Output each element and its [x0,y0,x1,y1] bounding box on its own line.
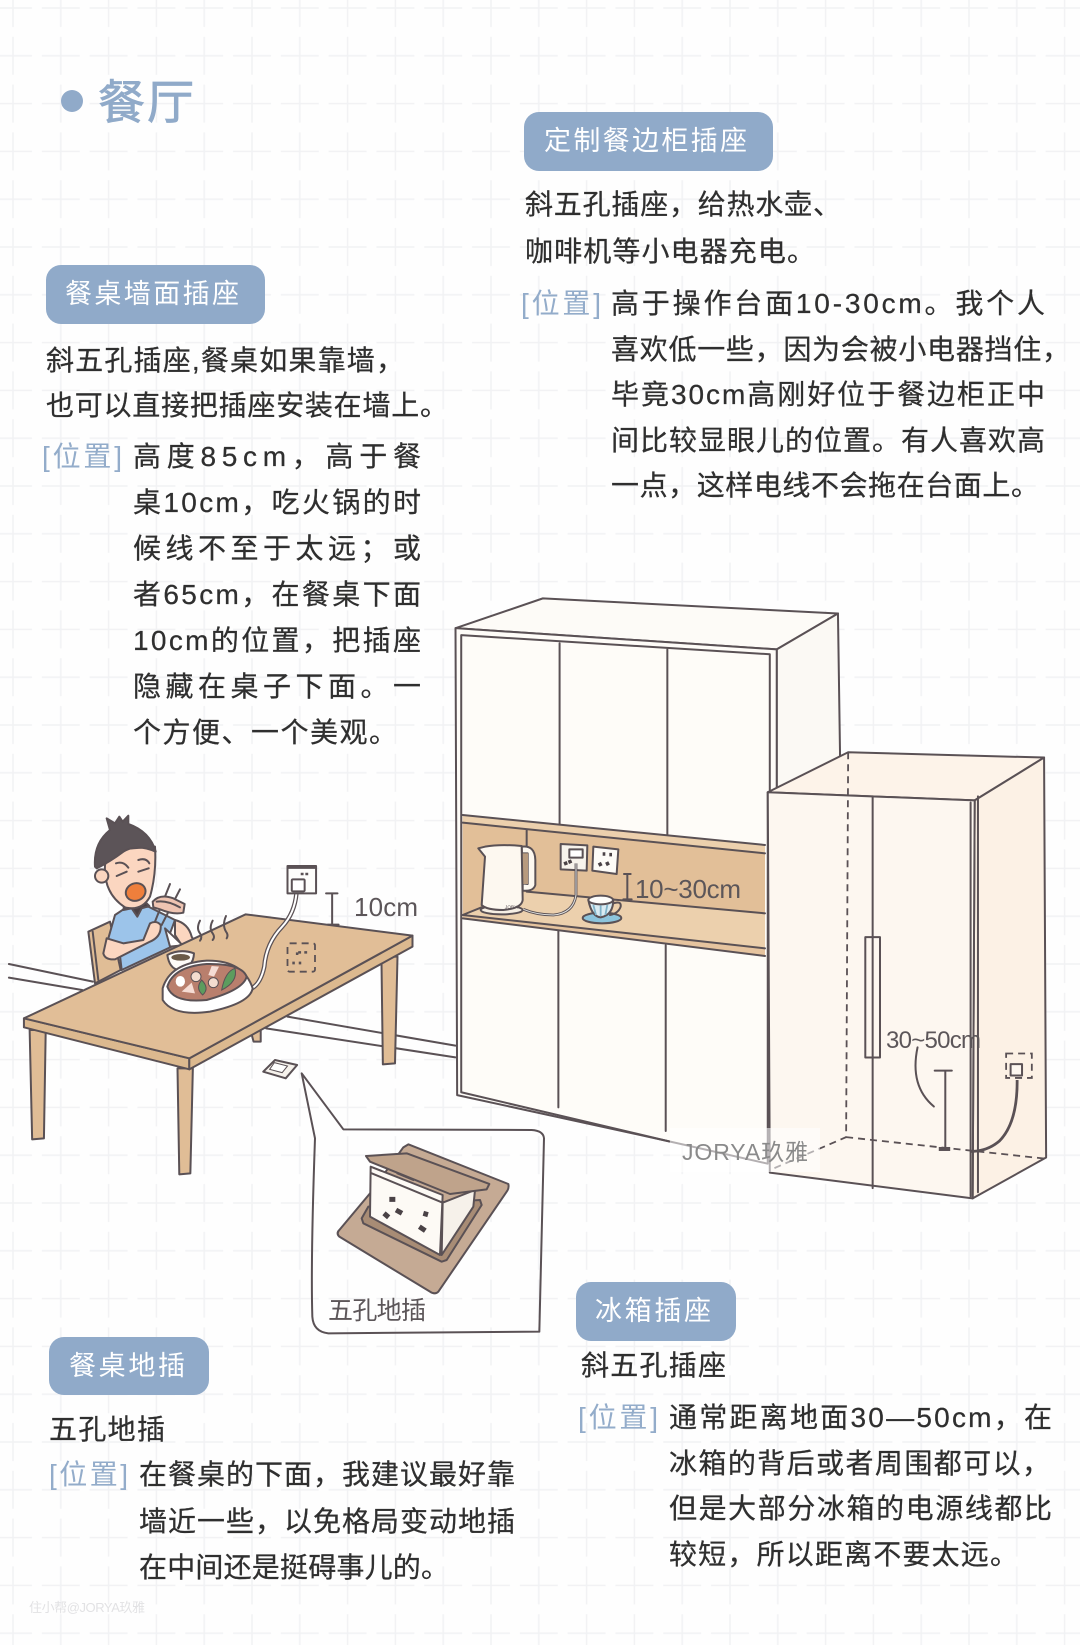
text block: fridge socket position [578,1402,1052,1570]
text block: wall socket position: 10cm的位置，把插座 [133,625,421,656]
panel: dining table wall socket text [42,265,448,748]
label: 30-50cm: 30~50cm [886,1027,981,1054]
icon: wall socket with plug and cord [252,866,316,988]
text block: wall socket position: [位置] [42,441,122,472]
panel: sideboard socket text [521,112,1070,501]
label: five-hole floor socket: 五孔地插 [328,1297,426,1325]
icon: hidden socket under table [287,943,315,972]
text block: sideboard description: 斜五孔插座，给热水壶、 [525,189,841,220]
text block: sideboard description: 咖啡机等小电器充电。 [525,236,815,267]
text block: wall socket position [42,441,421,748]
text block: floor socket position: 在中间还是挺碍事儿的。 [139,1552,449,1583]
text block: wall socket position: 个方便、一个美观。 [133,717,397,748]
watermark: source: 住小帮@JORYA玖雅 [29,1600,145,1615]
label: 10-30cm: 10~30cm [635,874,741,904]
watermark [670,1128,820,1172]
heading pill: fridge socket: 冰箱插座 [595,1296,711,1326]
text block: wall socket position: 候线不至于太远；或 [133,533,421,564]
watermark: JORYA玖雅 [682,1139,808,1165]
text block: wall socket description: 斜五孔插座,餐桌如果靠墙， [46,345,404,376]
text block: fridge socket position: 较短，所以距离不要太远。 [669,1539,1018,1570]
icon: chair and person eating [88,816,199,983]
icon: small floor socket [263,1060,297,1078]
text block: sideboard position: 喜欢低一些，因为会被小电器挡住， [611,334,1070,365]
text block: wall socket position: 高度85cm，高于餐 [133,441,421,472]
dimension marker 30-50cm [916,1047,952,1149]
table top [24,914,412,1069]
heading pill: dining table wall socket [46,265,265,324]
text block: wall socket position: 者65cm，在餐桌下面 [133,579,421,610]
dimension marker 10cm [326,893,339,925]
heading pill: sideboard socket [524,112,773,171]
illustration: fridge [768,752,1046,1198]
panel: floor socket text [49,1337,515,1583]
icon: bowl, hot pot and steam [163,916,253,1013]
icon: wall sockets [561,844,618,874]
title: 餐厅 [98,76,194,129]
text block: floor socket description: 五孔地插 [49,1414,165,1445]
text block: wall socket description: 也可以直接把插座安装在墙上。 [46,390,448,421]
heading pill: floor socket [49,1337,209,1395]
text block: fridge socket description: 斜五孔插座 [581,1350,726,1381]
text block: sideboard position: 毕竟30cm高刚好位于餐边柜正中 [611,379,1045,410]
illustration: dining table base [9,964,455,1057]
icon: kettle: JORYA [505,904,521,909]
icon: pop-up floor socket [338,1144,509,1293]
text block: wall socket description [46,345,448,421]
callout: floor socket detail [302,1073,544,1333]
panel: fridge socket text [576,1282,1052,1570]
dimension marker 10-30cm [623,874,632,899]
text block: sideboard position [521,288,1070,501]
text block: wall socket position: 隐藏在桌子下面。一 [133,671,421,702]
text block: fridge socket position: 通常距离地面30—50cm，在 [669,1402,1052,1433]
text block: floor socket position: [位置] [49,1459,128,1490]
illustration: sideboard niche with kettle, sockets and cup [463,815,765,956]
kettle power cord [523,863,576,915]
text block: floor socket position: 墙近一些，以免格局变动地插 [139,1506,515,1537]
text block: fridge socket position: 但是大部分冰箱的电源线都比 [669,1493,1052,1524]
text block: sideboard position: 一点，这样电线不会拖在台面上。 [611,470,1039,501]
icon: kettle [478,845,535,914]
baseboard lines [9,964,455,1057]
text block: wall socket position: 桌10cm，吃火锅的时 [133,487,421,518]
icon: tea cup [583,896,621,923]
label: 10cm: 10cm [354,892,418,922]
heading pill: floor socket: 餐桌地插 [69,1351,185,1381]
icon: fridge socket with cord [971,1053,1032,1151]
text block: floor socket position [49,1459,515,1583]
table legs [30,957,397,1174]
text block: sideboard position: 间比较显眼儿的位置。有人喜欢高 [611,425,1045,456]
heading pill: sideboard socket: 定制餐边柜插座 [544,126,747,156]
illustration: dining table [24,866,412,1174]
illustration: sideboard cabinet [456,598,840,1164]
text block: floor socket position: 在餐桌的下面，我建议最好靠 [139,1459,515,1490]
text block: sideboard position: [位置] [521,288,601,319]
text block: sideboard position: 高于操作台面10-30cm。我个人 [611,288,1045,319]
heading pill: fridge socket [576,1282,736,1341]
text block: fridge socket position: 冰箱的背后或者周围都可以， [669,1448,1050,1479]
text block: sideboard description [525,189,841,267]
text block: fridge socket position: [位置] [578,1402,658,1433]
heading pill: dining table wall socket: 餐桌墙面插座 [65,279,239,309]
